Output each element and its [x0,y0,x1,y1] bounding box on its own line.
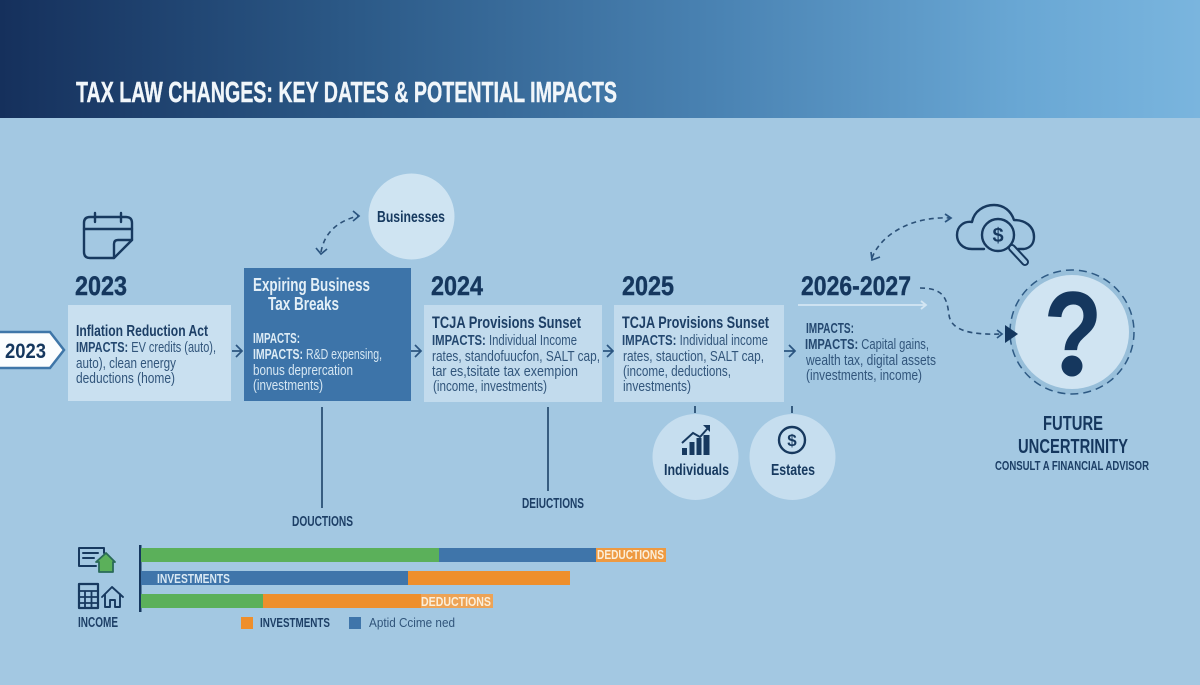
card text: deductions (home) [76,371,175,387]
circle: Estates [750,414,836,500]
arrow [784,345,795,357]
card text: rates, standofuucfon, SALT cap, [432,349,600,365]
legend: Aptid Ccime ned [369,615,455,630]
bar: row 2: INVESTMENTS [157,571,230,586]
tag: 2023 [0,332,64,368]
year: 2023: 2023 [75,271,127,301]
text: 2026-2027 impacts: wealth tax, digital assets [805,353,936,369]
legend [241,615,455,630]
callout: future uncertainty: UNCERTRINITY [1018,436,1128,458]
text: 2026-2027 impacts: (investments, income) [806,368,922,384]
card heading: Expiring Business [253,275,370,295]
year: 2024: 2024 [431,271,483,301]
circle: future uncertainty question mark: ? [1044,268,1102,402]
dashed arrow: Businesses [316,211,359,254]
label: deductions left: DOUCTIONS [292,514,353,530]
card text: investments) [623,379,691,395]
icon: bar chart with arrow [682,425,710,455]
card text: IMPACTS: [253,331,300,347]
card text: rates, stauction, SALT cap, [623,349,764,365]
card text: tar es,tsitate tax exempion [432,364,578,380]
text: 2026-2027 impacts [805,321,936,384]
icon: calculator and house [79,584,123,608]
icon: document and house [79,548,115,572]
callout: future uncertainty: FUTURE [1043,413,1103,435]
card text: (income, investments) [433,379,547,395]
timeline arrow: 2026-2027 [798,301,926,309]
card text: IMPACTS: EV credits (auto), [76,340,216,356]
circle: future uncertainty question mark [1005,268,1134,402]
header banner [0,0,1200,118]
circle: Businesses [368,174,454,260]
text: 2026-2027 impacts: IMPACTS: Capital gains, [805,337,929,353]
card text [432,333,600,395]
bar: row 3 [141,594,493,609]
card text: IMPACTS: Individual Income [432,333,577,349]
circle: Businesses: Businesses [377,209,445,226]
year: 2026-2027: 2026-2027 [801,271,911,301]
card text: IMPACTS: R&D expensing, [253,347,382,363]
dashed arrow: to future uncertainty [920,288,1002,338]
text: 2026-2027 impacts: IMPACTS: [806,321,854,337]
arrow [603,345,613,357]
card text: bonus deprercation [253,363,353,379]
circle: Estates: Estates [771,462,815,479]
card text: (investments) [253,378,323,394]
icon: cloud with magnifying glass [957,205,1034,262]
card text: IMPACTS: Individual income [622,333,768,349]
arrow [232,345,242,357]
card text: auto), clean energy [76,356,177,372]
icon: dollar coin: $ [787,431,797,450]
label: income: INCOME [78,615,118,631]
card heading: Tax Breaks [268,294,339,314]
icon: calendar [84,213,132,258]
panel: Inflation Reduction Act [68,305,231,401]
connector ticks to circles [695,406,792,413]
panel: TCJA Provisions Sunset 2024 [424,305,602,402]
card text [622,333,768,395]
title: TAX LAW CHANGES: KEY DATES & POTENTIAL IMPACTS [76,77,617,109]
bar: row 2 [141,571,570,586]
card text: (income, deductions, [623,364,731,380]
bar: row 3: DEDUCTIONS [421,594,491,609]
circle: Individuals: Individuals [664,462,729,479]
card heading: TCJA Provisions Sunset [432,313,581,332]
circle: Individuals [652,414,738,500]
card text [253,331,382,394]
card text [76,340,216,387]
tag: 2023: 2023 [5,340,46,363]
card heading [253,275,370,314]
panel: Expiring Business Tax Breaks [244,268,411,401]
connector: card 2 to deductions [321,407,323,508]
card heading: TCJA Provisions Sunset [622,313,769,332]
bar: row 1 [141,547,666,562]
panel: TCJA Provisions Sunset 2025 [614,305,784,402]
callout: future uncertainty [995,413,1149,473]
icon: cloud with magnifying glass: $ [992,225,1004,247]
bar chart [139,545,666,612]
card heading: Inflation Reduction Act [76,323,209,340]
dashed arrow: to cloud [871,214,951,260]
label: deductions right: DEIUCTIONS [522,496,584,512]
year: 2025: 2025 [622,271,674,301]
callout: future uncertainty: CONSULT A FINANCIAL ADVISOR [995,458,1149,473]
legend: INVESTMENTS [260,615,330,630]
connector: card 3 to deductions [547,407,549,491]
bar: row 1: DEDUCTIONS [597,547,664,562]
arrow [411,345,421,357]
